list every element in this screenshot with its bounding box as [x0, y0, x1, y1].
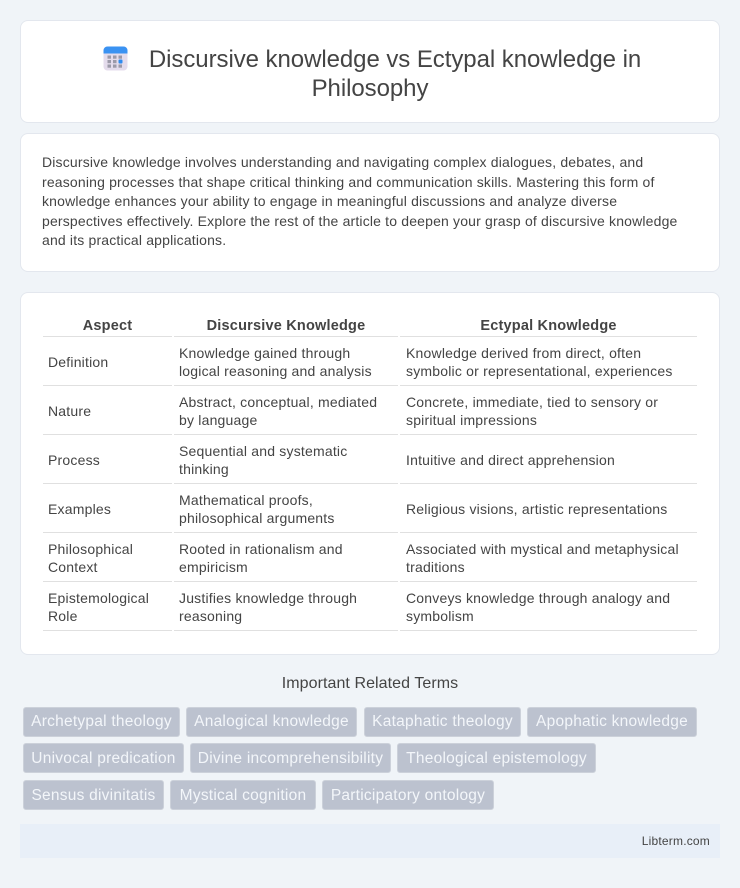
- tags: related terms: Divine incomprehensibility: [198, 750, 383, 767]
- row: examples: Mathematical proofs,: [179, 492, 313, 508]
- text: introduction: Discursive knowledge involves understanding and navigating complex dialogues, debates, and: [42, 154, 643, 170]
- heading: important related terms: Important Related Terms: [282, 675, 458, 692]
- row: philosophical context: Rooted in rationalism and: [179, 541, 343, 557]
- row: philosophical context: Philosophical: [48, 541, 133, 557]
- row: definition: logical reasoning and analysis: [179, 363, 372, 379]
- row: epistemological role: [48, 590, 670, 624]
- row: definition: Definition: [48, 354, 108, 370]
- row: epistemological role: Epistemological: [48, 590, 149, 606]
- tags: related terms: Kataphatic theology: [372, 713, 513, 730]
- row: nature: spiritual impressions: [406, 412, 537, 428]
- icon: calendar: [104, 46, 128, 70]
- row: philosophical context: Associated with mystical and metaphysical: [406, 541, 679, 557]
- tags: related terms: Participatory ontology: [331, 787, 485, 804]
- row: epistemological role: Role: [48, 608, 78, 624]
- row: nature: Concrete, immediate, tied to sensory or: [406, 394, 658, 410]
- title: Philosophy: [312, 75, 428, 102]
- row: nature: Abstract, conceptual, mediated: [179, 394, 377, 410]
- text: introduction: perspectives effectively. Explore the rest of the article to deepen your grasp of discursive knowledge: [42, 213, 678, 229]
- row: definition: [48, 345, 673, 379]
- row: examples: [48, 492, 668, 526]
- text: introduction: reasoning processes that shape critical thinking and communication skills. Mastering this form of: [42, 174, 655, 190]
- row: nature: [48, 394, 658, 428]
- title: [149, 46, 641, 102]
- tags: related terms: [23, 707, 697, 810]
- row: philosophical context: traditions: [406, 559, 465, 575]
- row: process: [48, 443, 615, 477]
- footer: [20, 824, 720, 858]
- table header: ectypal knowledge: Ectypal Knowledge: [480, 318, 617, 334]
- row: philosophical context: Context: [48, 559, 98, 575]
- row: epistemological role: Justifies knowledge through: [179, 590, 357, 606]
- row: epistemological role: Conveys knowledge through analogy and: [406, 590, 670, 606]
- row: process: Intuitive and direct apprehension: [406, 452, 615, 468]
- panel: introduction: [20, 133, 720, 272]
- panel: comparison table: [20, 292, 720, 655]
- row: process: Sequential and systematic: [179, 443, 347, 459]
- row: examples: Examples: [48, 501, 111, 517]
- tags: related terms: Univocal predication: [31, 750, 176, 767]
- tags: related terms: Analogical knowledge: [194, 713, 349, 730]
- footer: Libterm.com: [642, 834, 710, 848]
- tags: related terms: Apophatic knowledge: [536, 713, 688, 730]
- title: Discursive knowledge vs Ectypal knowledge in: [149, 46, 641, 73]
- row: philosophical context: [48, 541, 679, 575]
- tags: related terms: Theological epistemology: [406, 750, 587, 767]
- row: epistemological role: reasoning: [179, 608, 242, 624]
- text: introduction: knowledge enhances your ability to engage in meaningful discussions and analyze diverse: [42, 193, 617, 209]
- table header: aspect: Aspect: [83, 318, 132, 334]
- row: nature: by language: [179, 412, 258, 428]
- row: definition: Knowledge gained through: [179, 345, 350, 361]
- tags: related terms: Archetypal theology: [31, 713, 172, 730]
- text: introduction: and its practical applications.: [42, 232, 226, 248]
- table header: discursive knowledge: Discursive Knowledge: [207, 318, 365, 334]
- panel: header: [20, 20, 720, 123]
- tags: related terms: Mystical cognition: [180, 787, 306, 804]
- row: epistemological role: symbolism: [406, 608, 474, 624]
- text: introduction: [42, 154, 678, 248]
- row: examples: philosophical arguments: [179, 510, 335, 526]
- row: philosophical context: empiricism: [179, 559, 248, 575]
- tags: related terms: Sensus divinitatis: [31, 787, 156, 804]
- row: nature: Nature: [48, 403, 91, 419]
- row: examples: Religious visions, artistic representations: [406, 501, 668, 517]
- row: definition: symbolic or representational, experiences: [406, 363, 673, 379]
- row: process: Process: [48, 452, 100, 468]
- row: definition: Knowledge derived from direct, often: [406, 345, 641, 361]
- row: process: thinking: [179, 461, 229, 477]
